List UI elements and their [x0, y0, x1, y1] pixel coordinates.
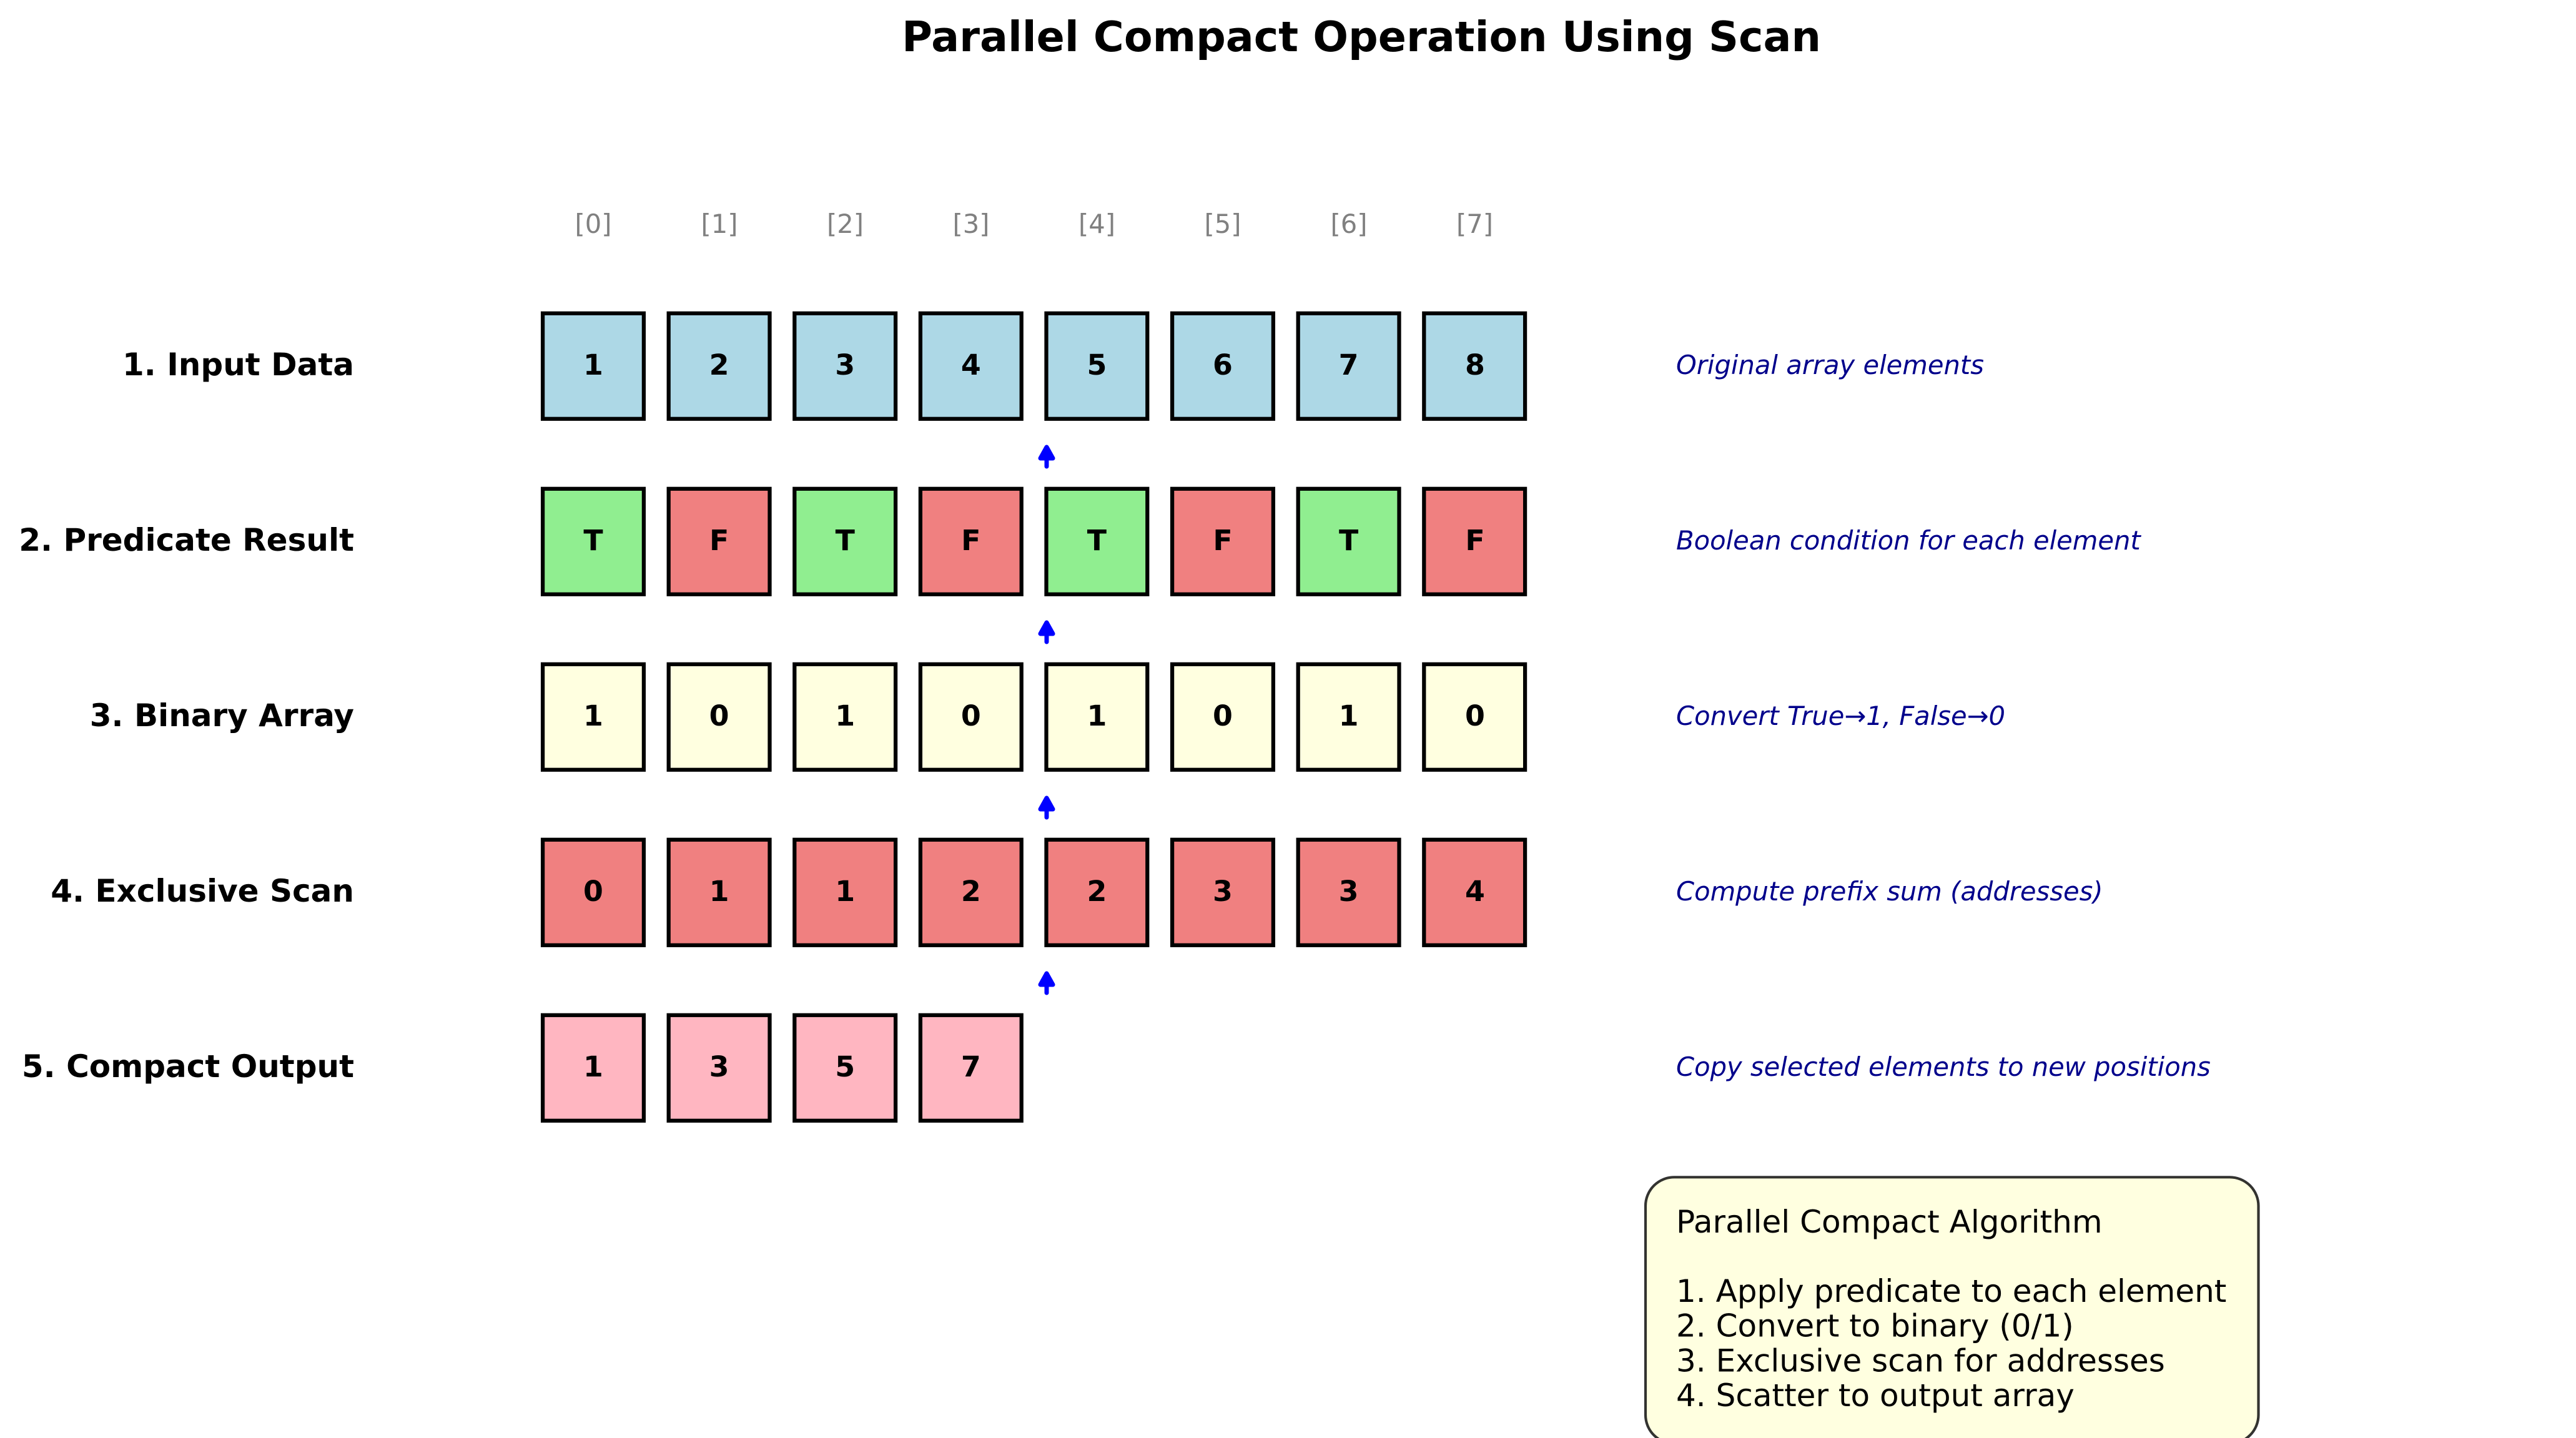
row 4: exclusive scan cells: 1	[835, 874, 855, 908]
panel text: 2. Convert to binary (0/1)	[1676, 1307, 2074, 1344]
row label: predicate result: 2. Predicate Result	[19, 522, 354, 558]
array index labels: [0]	[575, 209, 612, 239]
row 3: binary cells: 0	[961, 699, 981, 732]
row 2: predicate cells: F	[709, 523, 729, 557]
row 2: predicate cells	[543, 489, 1525, 594]
row 1: input data cells: 8	[1465, 348, 1485, 382]
row label: exclusive scan: 4. Exclusive Scan	[51, 873, 354, 909]
annotation: exclusive scan: Compute prefix sum (addresses)	[1676, 876, 2103, 907]
array index labels: [4]	[1078, 209, 1115, 239]
annotation: compact output: Copy selected elements to new positions	[1676, 1051, 2211, 1082]
row 3: binary cells: 0	[1465, 699, 1485, 732]
array index labels: [3]	[952, 209, 990, 239]
row 5: compact output cells: 5	[835, 1050, 855, 1083]
row 5: compact output cells: 3	[709, 1050, 729, 1083]
row 1: input data cells: 1	[583, 348, 603, 382]
array index labels: [6]	[1330, 209, 1368, 239]
panel: algorithm summary	[1646, 1177, 2258, 1438]
panel background	[1646, 1177, 2258, 1438]
row 4: exclusive scan cells: 3	[1339, 874, 1359, 908]
row 5: compact output cells: 1	[583, 1050, 603, 1083]
row 2: predicate cells: T	[583, 523, 603, 557]
row 2: predicate cells: F	[961, 523, 980, 557]
panel text: Parallel Compact Algorithm	[1676, 1204, 2103, 1240]
annotation: input data: Original array elements	[1676, 350, 1984, 380]
row 1: input data cells: 5	[1087, 348, 1107, 382]
row 4: exclusive scan cells: 3	[1213, 874, 1233, 908]
row 3: binary cells: 1	[1339, 699, 1359, 732]
row 4: exclusive scan cells: 2	[1087, 874, 1107, 908]
row 2: predicate cells: T	[836, 523, 856, 557]
row 1: input data cells: 2	[709, 348, 729, 382]
panel text: 1. Apply predicate to each element	[1676, 1273, 2226, 1309]
row 1: input data cells: 3	[835, 348, 855, 382]
array index labels	[575, 209, 1493, 239]
panel text	[1676, 1204, 2226, 1414]
arrow 3	[1040, 798, 1053, 817]
row 3: binary cells: 0	[1213, 699, 1233, 732]
annotation: binary array: Convert True→1, False→0	[1676, 701, 2005, 731]
row 4: exclusive scan cells: 2	[961, 874, 981, 908]
panel text: 3. Exclusive scan for addresses	[1676, 1342, 2165, 1379]
row 2: predicate cells: F	[1465, 523, 1485, 557]
row 5: compact output cells: 7	[961, 1050, 981, 1083]
row 4: exclusive scan cells: 1	[709, 874, 729, 908]
row 2: predicate cells: T	[1087, 523, 1107, 557]
row 3: binary cells: 1	[583, 699, 603, 732]
row 5: compact output cells	[543, 1015, 1022, 1121]
row label: binary array: 3. Binary Array	[90, 697, 354, 734]
arrow 2	[1040, 623, 1053, 642]
row label: input data: 1. Input Data	[122, 347, 354, 383]
array index labels: [5]	[1204, 209, 1241, 239]
row 4: exclusive scan cells: 0	[583, 874, 603, 908]
panel text: 4. Scatter to output array	[1676, 1377, 2075, 1414]
row 1: input data cells: 4	[961, 348, 981, 382]
row 1: input data cells	[543, 313, 1525, 419]
row 1: input data cells: 7	[1339, 348, 1359, 382]
row label: compact output: 5. Compact Output	[22, 1048, 354, 1085]
row 1: input data cells: 6	[1213, 348, 1233, 382]
annotation: predicate result: Boolean condition for each element	[1676, 525, 2141, 556]
array index labels: [7]	[1456, 209, 1493, 239]
row 3: binary cells: 0	[709, 699, 729, 732]
arrow 1	[1040, 447, 1053, 466]
row 4: exclusive scan cells: 4	[1465, 874, 1485, 908]
row 3: binary cells	[543, 664, 1525, 770]
title: Parallel Compact Operation Using Scan	[902, 12, 1821, 61]
array index labels: [1]	[701, 209, 738, 239]
row 3: binary cells: 1	[835, 699, 855, 732]
row 3: binary cells: 1	[1087, 699, 1107, 732]
row 2: predicate cells: T	[1339, 523, 1359, 557]
row 2: predicate cells: F	[1213, 523, 1233, 557]
row 4: exclusive scan cells	[543, 840, 1525, 945]
arrow 4	[1040, 973, 1053, 993]
array index labels: [2]	[827, 209, 864, 239]
